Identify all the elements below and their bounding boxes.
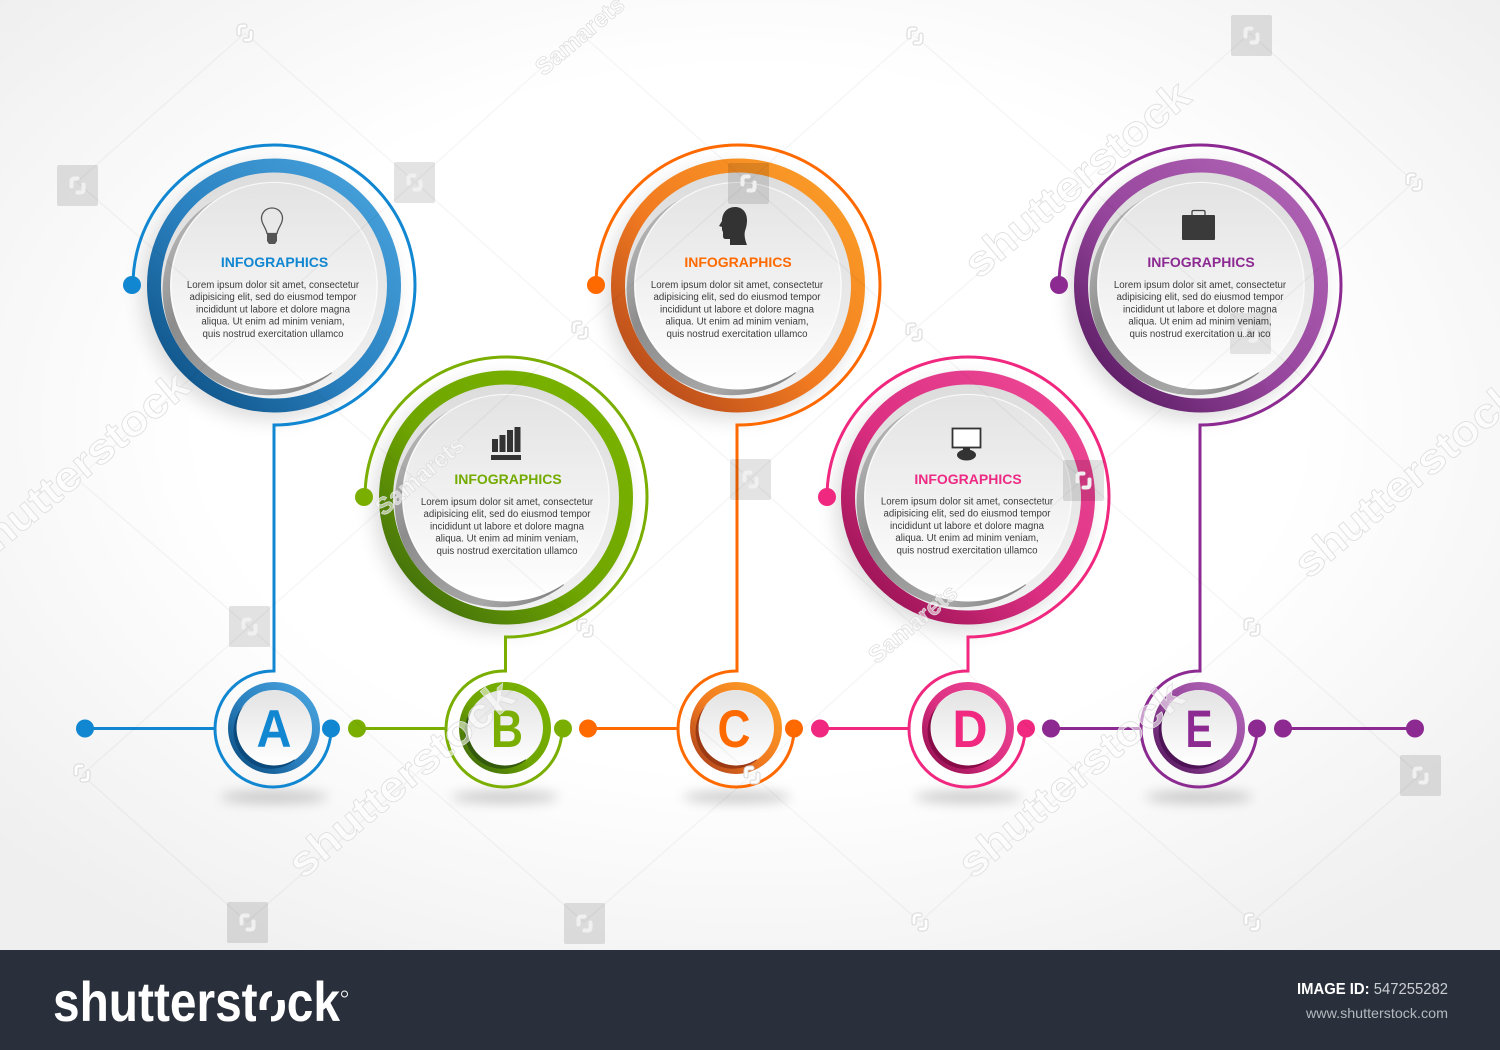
watermark text: shutterstock	[954, 70, 1200, 287]
website: www.shutterstock.com	[1305, 1005, 1448, 1021]
logo: shutterstock	[53, 970, 341, 1033]
icon: monitor	[952, 428, 980, 460]
text block	[187, 280, 360, 340]
text block: Lorem ipsum dolor sit amet, consectetur	[881, 496, 1054, 508]
connector A: thin line with dots and badge	[76, 145, 415, 803]
text block: incididunt ut labore et dolore magna	[196, 304, 351, 316]
text block: adipisicing elit, sed do eiusmod tempor	[1117, 292, 1284, 303]
icon: bar chart	[491, 427, 521, 460]
icon: light bulb	[262, 208, 282, 244]
icon: briefcase	[1182, 210, 1215, 240]
text block: incididunt ut labore et dolore magna	[660, 304, 815, 316]
text block: quis nostrud exercitation ullamco	[896, 546, 1038, 556]
text block: aliqua. Ut enim ad minim veniam,	[665, 316, 809, 328]
connector E: thin line with dots and badge	[1042, 145, 1424, 803]
heading: INFOGRAPHICS	[1147, 254, 1255, 270]
step A: blue large circle	[142, 166, 394, 419]
badge C	[694, 686, 778, 770]
step B: green large circle	[374, 378, 626, 631]
text block	[421, 497, 594, 557]
text block	[651, 280, 824, 340]
connector D: thin line with dots and badge	[811, 357, 1109, 803]
image id: IMAGE ID: 547255282	[1297, 981, 1448, 998]
watermark text: shutterstock	[948, 670, 1194, 887]
heading: INFOGRAPHICS	[684, 254, 792, 270]
text block: aliqua. Ut enim ad minim veniam,	[435, 534, 579, 544]
text block: aliqua. Ut enim ad minim veniam,	[201, 316, 345, 328]
watermark outline icons	[76, 26, 1420, 929]
text block: incididunt ut labore et dolore magna	[1123, 304, 1278, 316]
text block: Lorem ipsum dolor sit amet, consectetur	[187, 280, 360, 291]
badge E: E	[1186, 700, 1212, 759]
watermark text: shutterstock	[278, 670, 524, 887]
step D: pink large circle	[836, 378, 1088, 631]
badge B	[463, 686, 547, 770]
text block: incididunt ut labore et dolore magna	[430, 522, 585, 532]
text block: quis nostrud exercitation ullamco	[202, 329, 344, 340]
icon: person head	[719, 207, 747, 245]
text block: Lorem ipsum dolor sit amet, consectetur	[1114, 280, 1287, 291]
step C: orange large circle	[606, 166, 858, 419]
text block: incididunt ut labore et dolore magna	[890, 521, 1045, 532]
text block: quis nostrud exercitation ullamco	[436, 546, 578, 557]
text block: aliqua. Ut enim ad minim veniam,	[1128, 316, 1272, 328]
connector C: thin line with dots and badge	[579, 145, 880, 803]
text block	[881, 496, 1054, 556]
text block: adipisicing elit, sed do eiusmod tempor	[884, 508, 1051, 520]
badge E	[1157, 686, 1241, 770]
step E: purple large circle	[1069, 166, 1321, 419]
text block: quis nostrud exercitation ullamco	[1129, 329, 1271, 340]
footer bar	[0, 950, 1500, 1050]
text block: adipisicing elit, sed do eiusmod tempor	[424, 509, 591, 520]
watermark text: Samarets	[863, 579, 963, 669]
text block: Lorem ipsum dolor sit amet, consectetur	[421, 497, 594, 508]
watermark text: Samarets	[370, 431, 470, 521]
text block: aliqua. Ut enim ad minim veniam,	[895, 533, 1039, 544]
text block	[1114, 280, 1287, 340]
heading: INFOGRAPHICS	[454, 471, 562, 487]
badge D	[926, 686, 1010, 770]
text block: Lorem ipsum dolor sit amet, consectetur	[651, 280, 824, 291]
connector B: thin line with dots and badge	[348, 357, 647, 803]
badge C: C	[718, 700, 750, 759]
badge B: B	[491, 700, 523, 759]
badge A: A	[256, 700, 292, 759]
heading: INFOGRAPHICS	[221, 254, 328, 270]
badge A	[232, 686, 316, 770]
badge D: D	[952, 700, 988, 759]
heading: INFOGRAPHICS	[914, 471, 1022, 487]
text block: adipisicing elit, sed do eiusmod tempor	[654, 292, 821, 303]
text block: adipisicing elit, sed do eiusmod tempor	[190, 292, 357, 303]
text block: quis nostrud exercitation ullamco	[666, 329, 808, 340]
